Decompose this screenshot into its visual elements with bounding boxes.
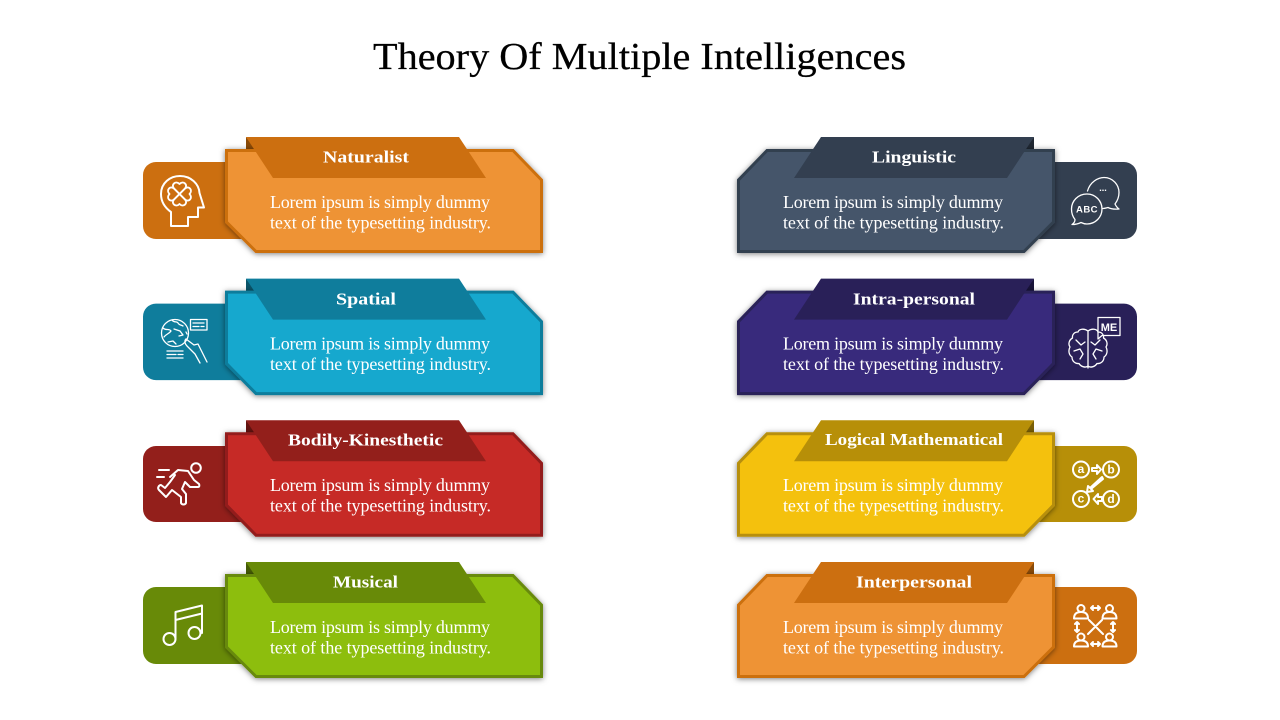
icon: speech bubbles ABC: ABC [1076, 204, 1098, 216]
icon tab: Linguistic [1017, 162, 1137, 239]
text block: Bodily-Kinesthetic: text of the typesetting industry. [270, 496, 491, 516]
ribbon fold: Linguistic [1024, 137, 1034, 150]
heading: Musical: Musical [333, 572, 398, 592]
ribbon: Linguistic [794, 137, 1034, 178]
heading: Spatial: Spatial [336, 290, 396, 309]
icon: a b c d logic flow [1073, 462, 1119, 507]
ribbon fold: Interpersonal [1024, 562, 1034, 575]
text block: Logical Mathematical [783, 475, 1004, 516]
text block: Logical Mathematical: text of the typesetting industry. [783, 496, 1004, 516]
heading: Interpersonal: Interpersonal [856, 572, 972, 592]
panel: Musical [143, 562, 542, 676]
panel: Naturalist [143, 137, 542, 252]
ribbon: Interpersonal [794, 562, 1034, 603]
icon: head with clover [161, 176, 204, 226]
panel: Bodily-Kinesthetic [143, 420, 542, 535]
ribbon: Musical [246, 562, 486, 603]
icon: running person [157, 463, 201, 504]
text block: Musical: text of the typesetting industry. [270, 638, 491, 658]
icon tab: Musical [143, 587, 263, 664]
heading: Intra-personal: Intra-personal [853, 290, 975, 309]
card body: Intra-personal [738, 292, 1054, 394]
text block: Linguistic: text of the typesetting industry. [783, 212, 1004, 232]
text block: Musical [270, 617, 491, 658]
card body: Logical Mathematical [738, 434, 1054, 535]
icon: speech bubbles ABC [1072, 178, 1119, 224]
card body: Musical [226, 576, 542, 676]
icon: brain with ME label [1069, 318, 1120, 368]
icon tab: Interpersonal [1017, 587, 1137, 664]
panel: Spatial [143, 279, 542, 394]
icon: a b c d logic flow: d [1107, 492, 1115, 506]
text block: Naturalist [270, 192, 491, 232]
icon: hand touching globe [162, 320, 207, 363]
text block: Bodily-Kinesthetic [270, 475, 491, 516]
ribbon: Naturalist [246, 137, 486, 178]
card body: Interpersonal [738, 576, 1054, 676]
text block: Spatial [270, 334, 491, 374]
text block: Logical Mathematical: Lorem ipsum is simply dummy [783, 475, 1003, 495]
text block: Interpersonal: Lorem ipsum is simply dummy [783, 617, 1003, 637]
icon tab: Intra-personal [1017, 304, 1137, 380]
ribbon: Bodily-Kinesthetic [246, 420, 486, 461]
ribbon fold: Logical Mathematical [1024, 420, 1034, 433]
ribbon: Spatial [246, 279, 486, 320]
panel: Intra-personal [738, 279, 1137, 394]
heading: Logical Mathematical: Logical Mathematical [825, 430, 1003, 449]
icon: a b c d logic flow: c [1078, 492, 1085, 506]
icon: speech bubbles ABC: ... [1099, 183, 1107, 193]
icon: brain with ME label: ME [1101, 322, 1117, 334]
ribbon: Logical Mathematical [794, 420, 1034, 461]
text block: Linguistic [783, 192, 1004, 232]
panel: Logical Mathematical [738, 420, 1137, 535]
heading: Naturalist: Naturalist [323, 148, 410, 166]
icon tab: Logical Mathematical [1017, 446, 1137, 522]
text block: Naturalist: Lorem ipsum is simply dummy [270, 192, 490, 212]
ribbon fold: Musical [246, 562, 256, 575]
text block: Intra-personal: text of the typesetting industry. [783, 354, 1004, 374]
text block: Naturalist: text of the typesetting industry. [270, 212, 491, 232]
text block: Spatial: text of the typesetting industry. [270, 354, 491, 374]
ribbon fold: Intra-personal [1024, 279, 1034, 292]
text block: Musical: Lorem ipsum is simply dummy [270, 617, 490, 637]
ribbon: Intra-personal [794, 279, 1034, 320]
text block: Intra-personal [783, 334, 1004, 374]
ribbon fold: Naturalist [246, 137, 256, 150]
icon: four connected people [1074, 605, 1116, 646]
panel: Linguistic [738, 137, 1137, 252]
card body: Naturalist [226, 150, 542, 252]
ribbon fold: Spatial [246, 279, 256, 292]
card body: Linguistic [738, 150, 1054, 252]
icon: music notes [164, 606, 202, 645]
text block: Interpersonal: text of the typesetting industry. [783, 638, 1004, 658]
text block: Intra-personal: Lorem ipsum is simply dummy [783, 334, 1003, 354]
heading: Linguistic: Linguistic [872, 148, 956, 166]
ribbon fold: Bodily-Kinesthetic [246, 420, 256, 433]
icon tab: Naturalist [143, 162, 263, 239]
text block: Bodily-Kinesthetic: Lorem ipsum is simply dummy [270, 475, 490, 495]
icon tab: Bodily-Kinesthetic [143, 446, 263, 522]
icon: a b c d logic flow: b [1107, 462, 1115, 476]
icon: a b c d logic flow: a [1078, 462, 1085, 476]
heading: Bodily-Kinesthetic: Bodily-Kinesthetic [288, 431, 443, 450]
text block: Spatial: Lorem ipsum is simply dummy [270, 334, 490, 354]
card body: Spatial [226, 292, 542, 394]
text block: Linguistic: Lorem ipsum is simply dummy [783, 192, 1003, 212]
panel: Interpersonal [738, 562, 1137, 676]
text block: Interpersonal [783, 617, 1004, 658]
card body: Bodily-Kinesthetic [226, 434, 542, 535]
icon tab: Spatial [143, 304, 263, 380]
title: Theory Of Multiple Intelligences [373, 36, 906, 78]
